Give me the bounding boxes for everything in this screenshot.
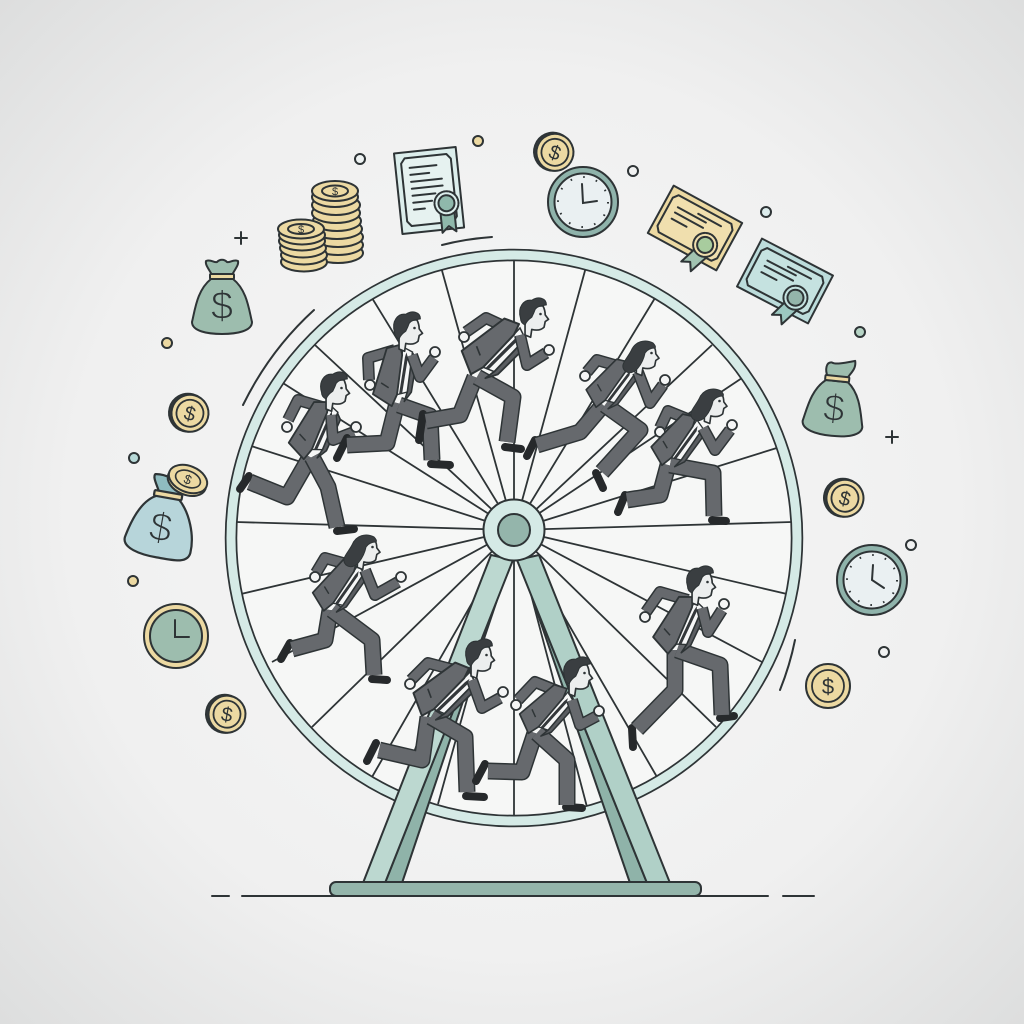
icon: lower left coin [203, 692, 249, 736]
spokes [236, 260, 792, 816]
icon: left upper coin [165, 389, 213, 436]
icon: lower right coin: $ [822, 674, 834, 699]
icon: blue money bag with coin [122, 459, 211, 563]
ground line [212, 895, 814, 897]
plus marks [235, 232, 898, 443]
decorative coin top: $ [546, 141, 564, 166]
icon: right money bag [801, 356, 869, 439]
rim [231, 255, 797, 821]
icon: right coin: $ [836, 487, 853, 511]
base [330, 882, 701, 896]
icon: lower left coin: $ [219, 703, 234, 727]
wheel interior [234, 258, 794, 818]
decorative coin top [529, 127, 579, 177]
runner 9 [476, 657, 604, 808]
runner 2 [337, 312, 450, 465]
runner 6 [281, 535, 406, 680]
icon: blue certificate [731, 239, 833, 335]
runner 4 [527, 341, 670, 488]
right rear strut [533, 600, 647, 883]
runner 8 [367, 639, 508, 797]
short stack: $ [298, 224, 304, 236]
left rear strut [385, 600, 497, 883]
runner 1 [240, 372, 361, 531]
icon: clock top [548, 167, 618, 237]
icon: left green clock [144, 604, 208, 668]
right front strut [517, 555, 670, 883]
hub [484, 500, 544, 560]
a-frame stand [330, 555, 701, 896]
icon: right money bag: $ [821, 387, 847, 431]
coin on bag: $ [182, 471, 195, 488]
runner 3 [419, 298, 554, 449]
icon: green money bag: $ [211, 284, 233, 328]
runner 7 [632, 566, 734, 747]
tall stack: $ [332, 186, 338, 198]
icon: right coin [820, 474, 868, 521]
motion arcs [243, 237, 795, 690]
bag: $ [146, 502, 176, 551]
hamster wheel [231, 255, 797, 821]
icon: yellow certificate [642, 186, 742, 282]
icon: lower right coin [806, 664, 850, 708]
icon: left upper coin: $ [181, 402, 198, 426]
floating dots [128, 136, 916, 657]
icon: coin stacks [278, 181, 363, 272]
left front strut [363, 555, 513, 883]
icon: right clock [837, 545, 907, 615]
icon: diploma certificate [394, 147, 464, 237]
icon: green money bag [192, 260, 252, 334]
runner 5 [618, 389, 737, 521]
